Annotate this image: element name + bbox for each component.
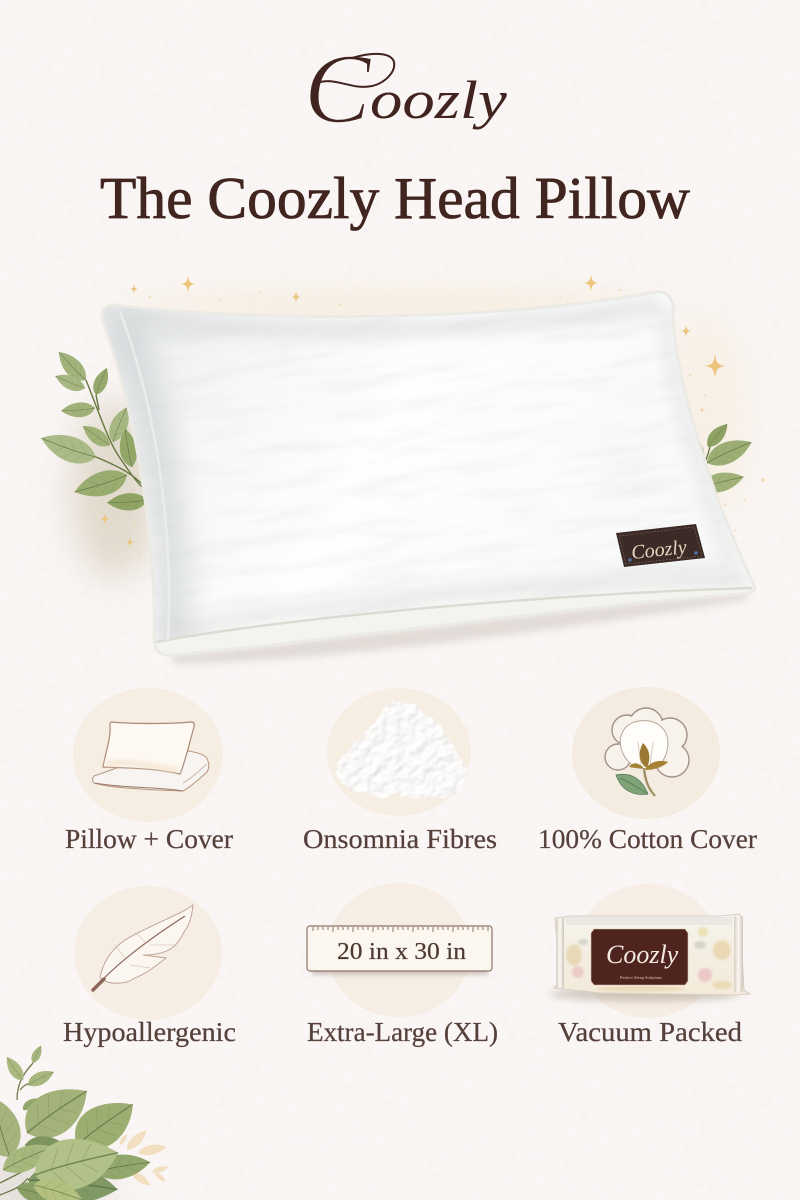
feature: 100% Cotton Cover — [538, 687, 757, 854]
pillow fabric shading — [107, 295, 750, 654]
ruler dimension text: 20 in x 30 in — [337, 939, 466, 965]
pillow shadow — [170, 592, 750, 664]
pillow bottom gusset — [158, 600, 636, 654]
icon: vacuum package: Perfect Sleep Solutions — [620, 975, 662, 980]
icon: cotton boll — [605, 708, 689, 796]
circle backdrop — [576, 884, 720, 1018]
sewn brand tag: Coozly — [630, 536, 688, 564]
ruler shadow — [312, 968, 488, 975]
label: Hypoallergenic — [63, 1017, 236, 1047]
pillow piping — [102, 292, 754, 655]
label: Extra-Large (XL) — [307, 1017, 498, 1047]
icon: fibre pile — [334, 701, 466, 798]
circle backdrop — [327, 883, 471, 1017]
icon: vacuum package: Coozly — [606, 940, 679, 969]
faded tan leaves — [118, 1127, 169, 1188]
icon: pillow and folded cover — [92, 722, 209, 791]
corner foliage — [0, 1044, 169, 1200]
gold specks — [89, 289, 746, 556]
pillow — [100, 290, 756, 666]
feature: Pillow + Cover — [65, 688, 233, 854]
label: Vacuum Packed — [558, 1017, 743, 1047]
logo: Coozly wordmark — [304, 33, 507, 144]
icon: feather — [93, 905, 193, 990]
label: 100% Cotton Cover — [538, 824, 757, 854]
floral print — [566, 927, 732, 992]
circle backdrop — [73, 688, 223, 822]
sewn brand tag — [616, 524, 705, 567]
icon: ruler — [307, 926, 492, 971]
package brand plate — [591, 929, 688, 985]
icon: vacuum package — [554, 914, 750, 995]
circle backdrop — [74, 886, 222, 1020]
logo: Coozly wordmark: oozly — [370, 70, 507, 130]
label: Pillow + Cover — [65, 824, 233, 854]
golden glow behind pillow — [70, 291, 750, 580]
feature: Hypoallergenic — [63, 886, 236, 1047]
circle backdrop — [572, 687, 720, 819]
pillow body — [102, 292, 754, 655]
cotton plant leaf — [616, 774, 648, 794]
feature: Onsomnia Fibres — [303, 688, 497, 854]
logo: Coozly wordmark: C — [304, 33, 372, 144]
package shadow — [550, 987, 740, 1001]
right leaf sprig — [683, 420, 756, 496]
feature: Extra-Large (XL) — [307, 883, 498, 1047]
feature: Vacuum Packed — [550, 884, 750, 1047]
sparkles — [100, 274, 766, 548]
circle backdrop — [327, 688, 471, 816]
label: Onsomnia Fibres — [303, 824, 497, 854]
left leaf sprig — [37, 346, 148, 512]
title: The Coozly Head Pillow — [100, 165, 690, 231]
